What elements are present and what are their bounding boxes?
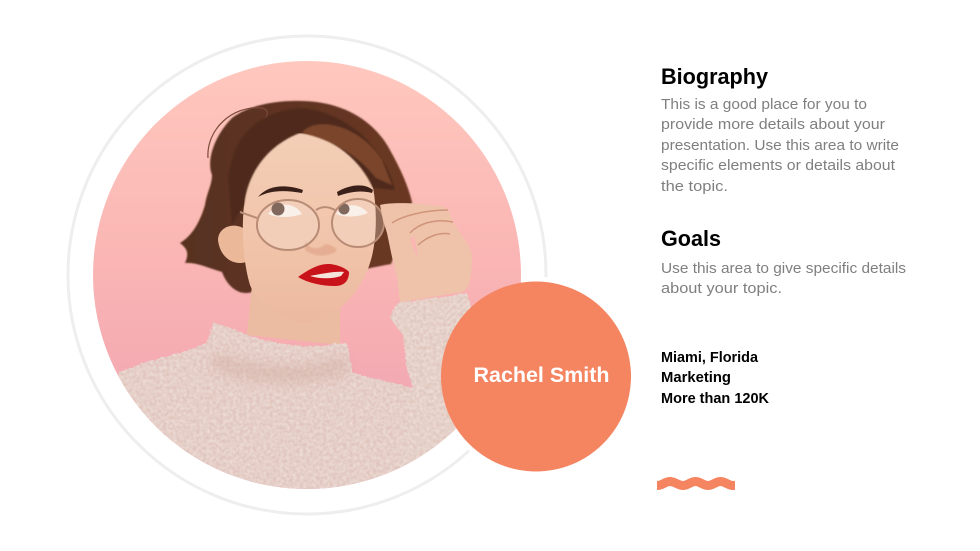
goals text: about your topic. [661, 280, 782, 297]
hair back [180, 101, 412, 293]
details list [661, 349, 769, 407]
lips [298, 264, 349, 286]
sleeve [390, 293, 472, 434]
details list: Marketing [661, 369, 731, 386]
biography text: specific elements or details about [661, 157, 896, 174]
nose [304, 242, 336, 256]
portrait photo [90, 60, 524, 500]
goals heading: Goals [661, 226, 721, 251]
ear [218, 226, 246, 263]
face [243, 133, 376, 322]
goals text [661, 260, 906, 297]
goals text: Use this area to give specific details [661, 260, 906, 277]
stray hair [208, 108, 267, 158]
sweater shading [210, 352, 350, 383]
details list: Miami, Florida [661, 349, 759, 366]
biography text: provide more details about your [661, 116, 885, 133]
name: Rachel Smith [474, 364, 610, 387]
biography text [661, 96, 899, 195]
finger lines [392, 210, 453, 245]
biography text: This is a good place for you to [661, 96, 867, 113]
biography text: the topic. [661, 178, 728, 195]
wave decoration [645, 482, 745, 486]
biography heading: Biography [661, 64, 769, 89]
biography text: presentation. Use this area to write [661, 137, 899, 154]
sweater body [118, 322, 421, 489]
hand [380, 203, 472, 302]
hair front [228, 108, 395, 225]
eyebrows [258, 185, 373, 197]
name badge [441, 282, 631, 472]
decorative ring [68, 36, 546, 514]
glasses [240, 199, 384, 250]
photo background [90, 60, 524, 490]
eyes [268, 205, 368, 217]
details list: More than 120K [661, 390, 769, 407]
ring gap around badge [436, 276, 636, 476]
neck [247, 285, 340, 345]
